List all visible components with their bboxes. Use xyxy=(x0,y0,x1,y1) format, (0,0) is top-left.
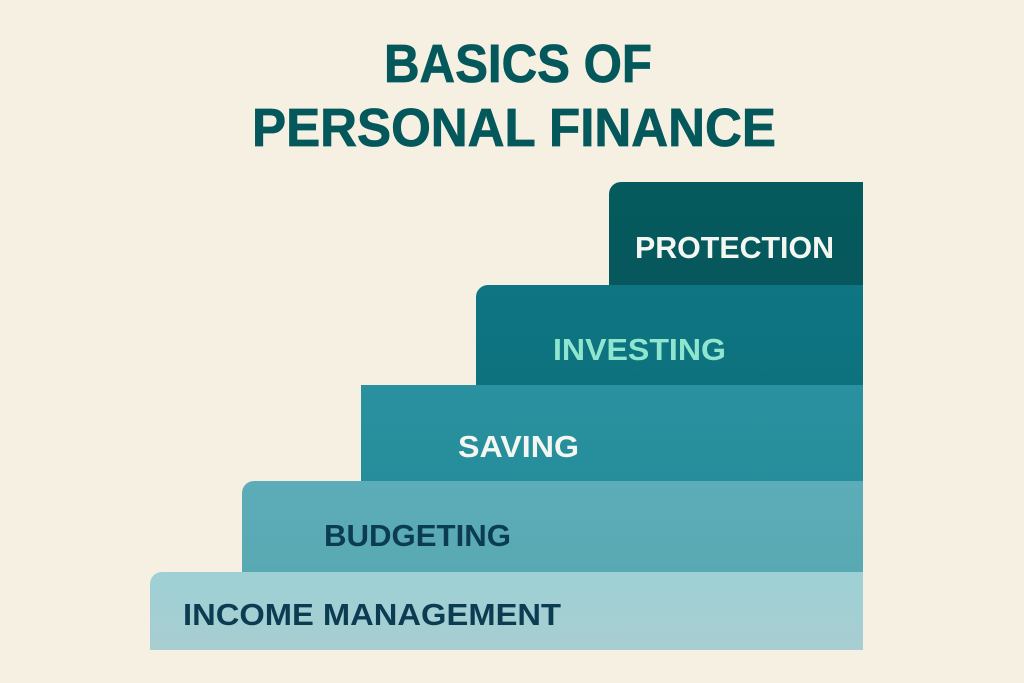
step 2: budgeting: BUDGETING xyxy=(324,518,511,553)
step 1: income management: INCOME MANAGEMENT xyxy=(183,597,561,632)
title: PERSONAL FINANCE xyxy=(252,98,776,158)
step 3: saving: SAVING xyxy=(458,429,579,464)
title xyxy=(252,34,776,158)
step 4: investing: INVESTING xyxy=(553,332,726,367)
step 2: budgeting xyxy=(242,481,863,572)
step 3: saving xyxy=(361,385,863,481)
staircase chart xyxy=(150,182,863,650)
step 5: protection: PROTECTION xyxy=(635,230,834,265)
step 4: investing xyxy=(476,285,863,385)
title: BASICS OF xyxy=(384,34,652,94)
step 5: protection xyxy=(609,182,863,285)
step 1: income management xyxy=(150,572,863,650)
